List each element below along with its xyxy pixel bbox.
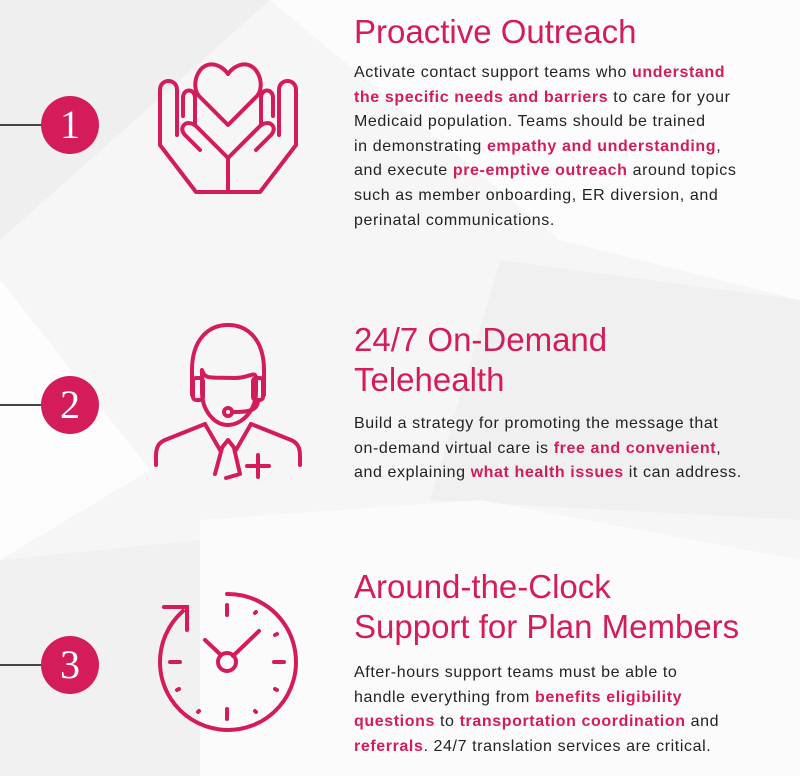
step 2 connector line [0, 404, 42, 406]
icon: clock with arrow [158, 592, 298, 732]
body 3: questions to transportation coordination and [354, 713, 719, 730]
title 2 [354, 321, 607, 398]
body 1 [354, 64, 736, 229]
number badge 3: 3 [60, 642, 80, 687]
body 2: on-demand virtual care is free and convenient, [354, 440, 721, 457]
body 2: and explaining what health issues it can address. [354, 464, 742, 481]
step 3 connector line [0, 664, 42, 666]
body 2 [354, 415, 742, 481]
title 2: 24/7 On-Demand [354, 321, 607, 358]
number badge 2: 2 [60, 382, 80, 427]
icon: hands holding heart [158, 62, 298, 194]
body 3: handle everything from benefits eligibility [354, 689, 682, 706]
body 1: Activate contact support teams who understand [354, 64, 725, 81]
icon: telehealth agent with headset [154, 323, 302, 480]
body 1: and execute pre-emptive outreach around topics [354, 162, 736, 179]
body 1: such as member onboarding, ER diversion, and [354, 187, 718, 204]
step 1 connector line [0, 124, 42, 126]
title 3: Around-the-Clock [354, 568, 611, 605]
body 3 [354, 664, 719, 755]
number badge 3 [41, 636, 99, 694]
body 3: After-hours support teams must be able to [354, 664, 677, 681]
body 1: Medicaid population. Teams should be trained [354, 113, 706, 130]
title 3 [354, 568, 739, 645]
number badge 1 [41, 96, 99, 154]
number badge 2 [41, 376, 99, 434]
body 1: in demonstrating empathy and understanding, [354, 138, 721, 155]
title 2: Telehealth [354, 361, 504, 398]
body 1: the specific needs and barriers to care for your [354, 89, 730, 106]
body 2: Build a strategy for promoting the message that [354, 415, 718, 432]
body 3: referrals. 24/7 translation services are critical. [354, 738, 711, 755]
body 1: perinatal communications. [354, 212, 555, 229]
title 3: Support for Plan Members [354, 608, 739, 645]
title 1: Proactive Outreach [354, 13, 636, 50]
number badge 1: 1 [60, 102, 80, 147]
